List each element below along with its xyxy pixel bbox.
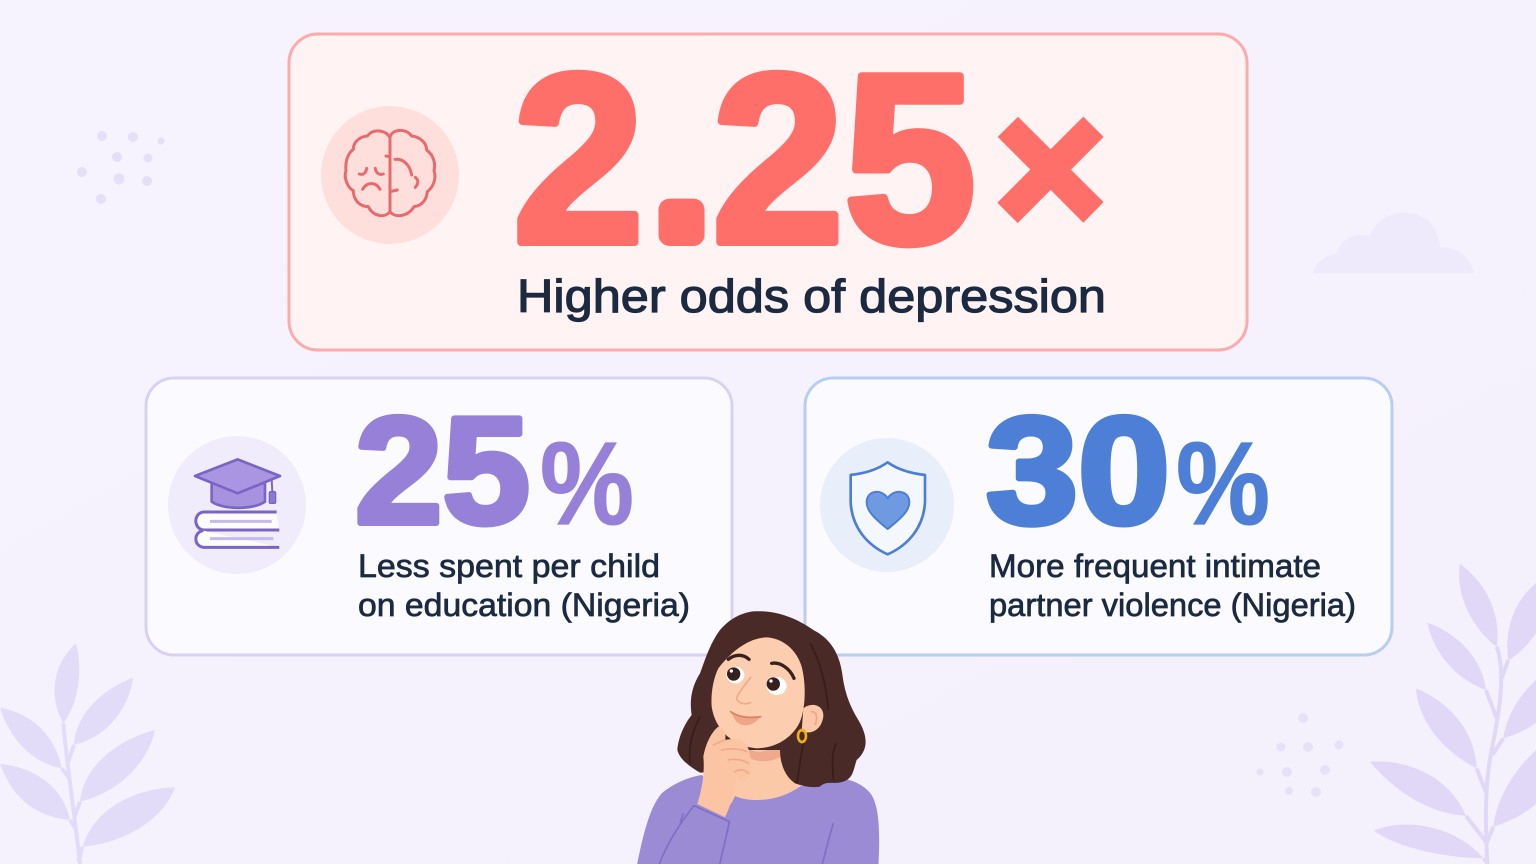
stat: 30 percent [986, 386, 1270, 556]
big number: 2.25x: 2 [513, 25, 644, 294]
stat: 30 percent: 30 [986, 386, 1170, 556]
big number: 2.25x [513, 25, 1106, 294]
mouth [731, 712, 761, 725]
face [711, 637, 805, 748]
label: higher odds of depression: Higher odds of depression [517, 270, 1106, 322]
stat: 25 percent: 25 [355, 386, 530, 556]
icon: shield with heart [820, 438, 954, 572]
panel: intimate partner violence [805, 378, 1392, 655]
stat: 30 percent: % [1176, 418, 1270, 550]
sweater collar edge [727, 785, 807, 813]
sleeve [658, 806, 729, 864]
neck [727, 740, 802, 804]
icon: sad brain [321, 106, 459, 244]
ear [802, 705, 823, 733]
decorative plant: right [1370, 564, 1536, 864]
hair strands [690, 643, 837, 783]
hair [677, 611, 866, 787]
eyes [726, 667, 744, 683]
decorative dots: bottom right [1256, 713, 1344, 797]
description: violence [989, 548, 1356, 623]
earring [798, 730, 806, 742]
sweater [637, 775, 879, 864]
stat: 25 percent [355, 386, 634, 556]
eyebrows [728, 655, 794, 678]
panel: depression odds [289, 25, 1247, 350]
nose [737, 677, 751, 704]
description: violence: partner violence (Nigeria) [989, 587, 1356, 623]
description: violence: More frequent intimate [989, 548, 1321, 584]
big number: 2.25x: . [658, 82, 705, 272]
illustration: thinking woman [637, 611, 879, 864]
decorative plant: left [0, 643, 175, 864]
stat: 25 percent: % [540, 418, 634, 550]
panel: education spending [146, 378, 732, 655]
big number: 2.25x: 25 [712, 25, 976, 294]
description: education [358, 548, 690, 623]
description: education: on education (Nigeria) [358, 587, 690, 623]
decorative cloud [1313, 213, 1474, 273]
hand [697, 727, 751, 817]
icon: graduation cap and books [168, 436, 306, 574]
description: education: Less spent per child [358, 548, 660, 584]
decorative dots: top left [77, 131, 164, 204]
big number: 2.25x: × [995, 62, 1106, 274]
